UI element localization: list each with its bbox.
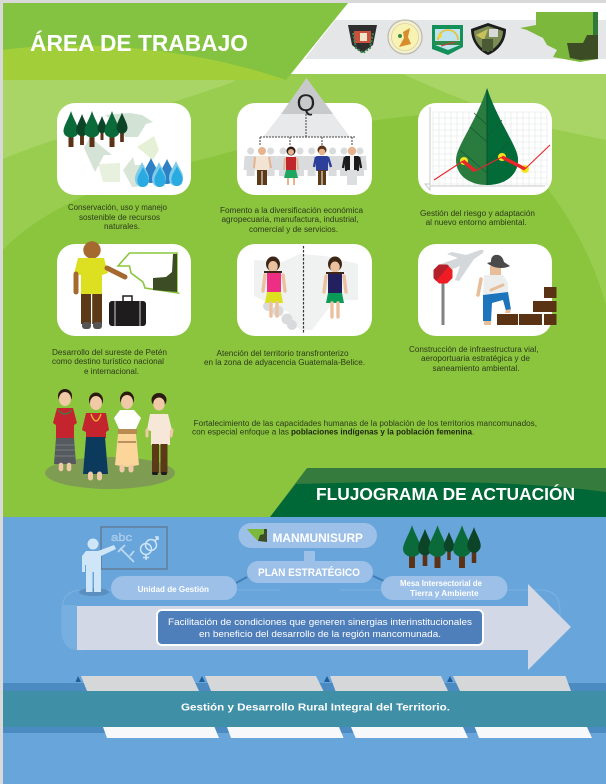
caption: Construcción de infraestructura vial,: [409, 345, 538, 354]
icon: bricks: [497, 287, 556, 325]
pill: mesa intersectorial: Mesa Intersectorial de: [400, 579, 483, 588]
pill: unidad de gestion: Unidad de Gestión: [138, 585, 209, 594]
icon: pyramid: Q: [297, 90, 315, 117]
person 2: [284, 146, 298, 185]
card: [57, 244, 191, 336]
ghost crowd: [244, 148, 367, 176]
panel: poblaciones indigenas: [45, 389, 537, 489]
text block: .: [472, 428, 474, 436]
icon: airplane: [438, 250, 484, 281]
girl right: [324, 256, 346, 317]
panel: conservacion: [57, 103, 191, 231]
caption: aeroportuaria estratégica y de: [421, 354, 531, 363]
card: [237, 103, 372, 195]
caption: como destino turístico nacional: [52, 357, 164, 366]
map of Guatemala: [520, 12, 598, 62]
connector block: [304, 551, 315, 562]
icon: tourist pointing: [74, 241, 125, 329]
caption: [52, 348, 167, 376]
text block: [192, 419, 537, 436]
caption: en la zona de adyacencia Guatemala-Belice.: [204, 358, 365, 367]
caption: [220, 206, 364, 234]
white tabs: [103, 727, 592, 738]
woman 2: [82, 392, 109, 478]
logo 1: [348, 25, 377, 53]
header white background: [289, 3, 606, 74]
caption: [68, 203, 168, 231]
icon: handshake: [254, 254, 358, 330]
header grey band: [305, 20, 606, 59]
arrows dashed: [260, 114, 355, 145]
panel: area de trabajo green background: [3, 3, 606, 517]
text block: poblaciones indígenas y la población femenina: [291, 428, 473, 436]
logo 2: [388, 20, 422, 54]
border dashed line: [302, 246, 304, 333]
panel: desarrollo sureste: [52, 241, 191, 376]
panel: gestion del riesgo: [418, 88, 552, 227]
caption: [204, 349, 365, 367]
callout box: [157, 610, 483, 645]
person 4: [343, 147, 361, 185]
icon: forest: [403, 525, 481, 568]
man: [147, 393, 172, 475]
pill: plan estrategico: PLAN ESTRATÉGICO: [258, 566, 360, 579]
pill: plan estrategico: [247, 561, 373, 583]
caption: [409, 345, 538, 373]
pill: unidad de gestion: [111, 576, 237, 600]
lower timeline band: [3, 727, 606, 733]
caption: Gestión del riesgo y adaptación: [420, 209, 535, 218]
timeline arrow: [77, 584, 571, 670]
caption: sostenible de recursos: [79, 213, 160, 222]
trend line: [434, 145, 550, 180]
panel: flujograma blue background: [3, 517, 606, 784]
chart axes: [425, 107, 545, 190]
teal banner: [3, 691, 606, 727]
text block: Fortalecimiento de las capacidades humanas de la población de los territorios mancomunados,: [194, 419, 537, 428]
callout box: en beneficio del desarrollo de la región mancomunada.: [199, 629, 441, 640]
icon: map: [118, 253, 178, 293]
caption: naturales.: [104, 222, 140, 231]
girl left: [263, 256, 285, 316]
caption: Atención del territorio transfronterizo: [216, 349, 349, 358]
panel: fomento: [220, 78, 372, 234]
pill: mesa intersectorial: [381, 576, 508, 600]
logo 4: [471, 23, 506, 55]
icon: trees: [64, 111, 128, 147]
title: ÁREA DE TRABAJO: [30, 29, 248, 56]
caption: comercial y de servicios.: [249, 225, 338, 234]
caption: agropecuaria, manufactura, industrial,: [222, 215, 358, 224]
pill: MANMUNISURP: MANMUNISURP: [272, 531, 363, 545]
caption: al nuevo entorno ambiental.: [426, 218, 527, 227]
woman 1: [53, 389, 77, 469]
caption: Fomento a la diversificación económica: [220, 206, 364, 215]
icon: teacher and board: [79, 527, 167, 596]
icon: leaf: [456, 88, 518, 185]
person 1: [254, 147, 271, 185]
card: [418, 244, 552, 336]
pill: MANMUNISURP: [238, 523, 377, 548]
caption: [420, 209, 535, 227]
panel: infraestructura: [409, 244, 556, 373]
caption: e internacional.: [84, 367, 139, 376]
header green banner: [3, 3, 348, 80]
pill: mesa intersectorial: Tierra y Ambiente: [410, 589, 479, 598]
caption: Conservación, uso y manejo: [68, 203, 168, 212]
ghost rounded outline: [62, 590, 560, 650]
chart grid: [433, 112, 547, 186]
text block: con especial enfoque a las: [192, 428, 289, 436]
icon: water drops: [135, 158, 183, 187]
icon: stop sign: [434, 264, 452, 325]
card: [237, 244, 372, 336]
icon: small map: [247, 529, 267, 542]
banner dark band: [270, 482, 606, 517]
card: [418, 103, 552, 195]
connector lines: [236, 576, 384, 583]
icon: suitcase: [109, 296, 146, 326]
card: [57, 103, 191, 195]
icon: recycling arrows: [84, 113, 159, 187]
teal banner: Gestión y Desarrollo Rural Integral del Territorio.: [181, 702, 450, 714]
person 3: [314, 146, 331, 185]
logo 3: [432, 25, 463, 55]
icon: worker: [478, 255, 511, 325]
caption: Desarrollo del sureste de Petén: [52, 348, 167, 357]
header lighter swoosh: [3, 45, 286, 80]
panel: header: [3, 3, 606, 80]
heading: FLUJOGRAMA DE ACTUACIÓN: [316, 483, 575, 504]
woman 3: [114, 392, 141, 470]
icon: teacher and board: abc: [111, 532, 133, 544]
caption: saneamiento ambiental.: [432, 364, 520, 373]
banner light band: [270, 468, 606, 517]
icon: pyramid: [263, 78, 350, 137]
ground ellipse: [45, 457, 175, 489]
upper timeline band: [3, 683, 606, 691]
banner: flujograma: [270, 468, 606, 517]
panel: territorio transfronterizo: [204, 244, 372, 367]
grey tabs: [76, 676, 571, 691]
callout box: Facilitación de condiciones que generen sinergias interinstitucionales: [168, 617, 472, 628]
